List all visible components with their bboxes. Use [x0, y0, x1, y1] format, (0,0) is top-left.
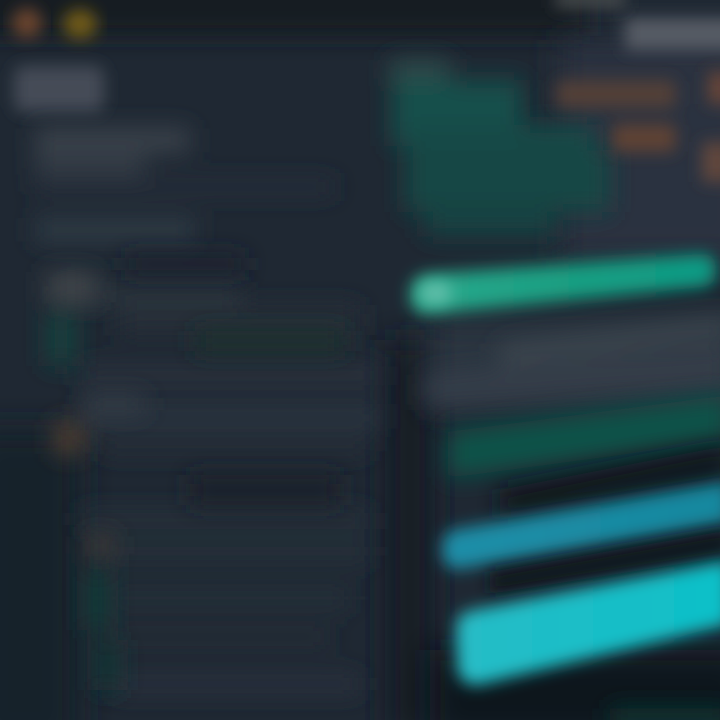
sidebar text block	[35, 128, 380, 693]
icon: orange dot	[12, 8, 42, 38]
sidebar heading	[14, 66, 104, 112]
dim green glow bottom right	[610, 708, 720, 720]
icon: yellow dot	[63, 9, 97, 39]
dark gap between bars	[500, 445, 720, 520]
sidebar dark gaps	[125, 255, 340, 505]
sidebar accent marks	[46, 272, 345, 690]
orange code tokens	[556, 72, 720, 182]
window control dots	[12, 8, 97, 39]
bar: cyan highlight	[456, 560, 720, 685]
gray code lines	[425, 316, 720, 405]
bar: blue highlight	[442, 481, 720, 569]
bar: green highlight	[410, 254, 716, 314]
top-right toolbar highlight	[555, 0, 720, 50]
dark gap between lower bars	[490, 530, 720, 594]
panel: sidebar code lines	[14, 66, 380, 693]
bar: dark green highlight	[448, 395, 720, 478]
panel: teal code block	[390, 60, 610, 236]
